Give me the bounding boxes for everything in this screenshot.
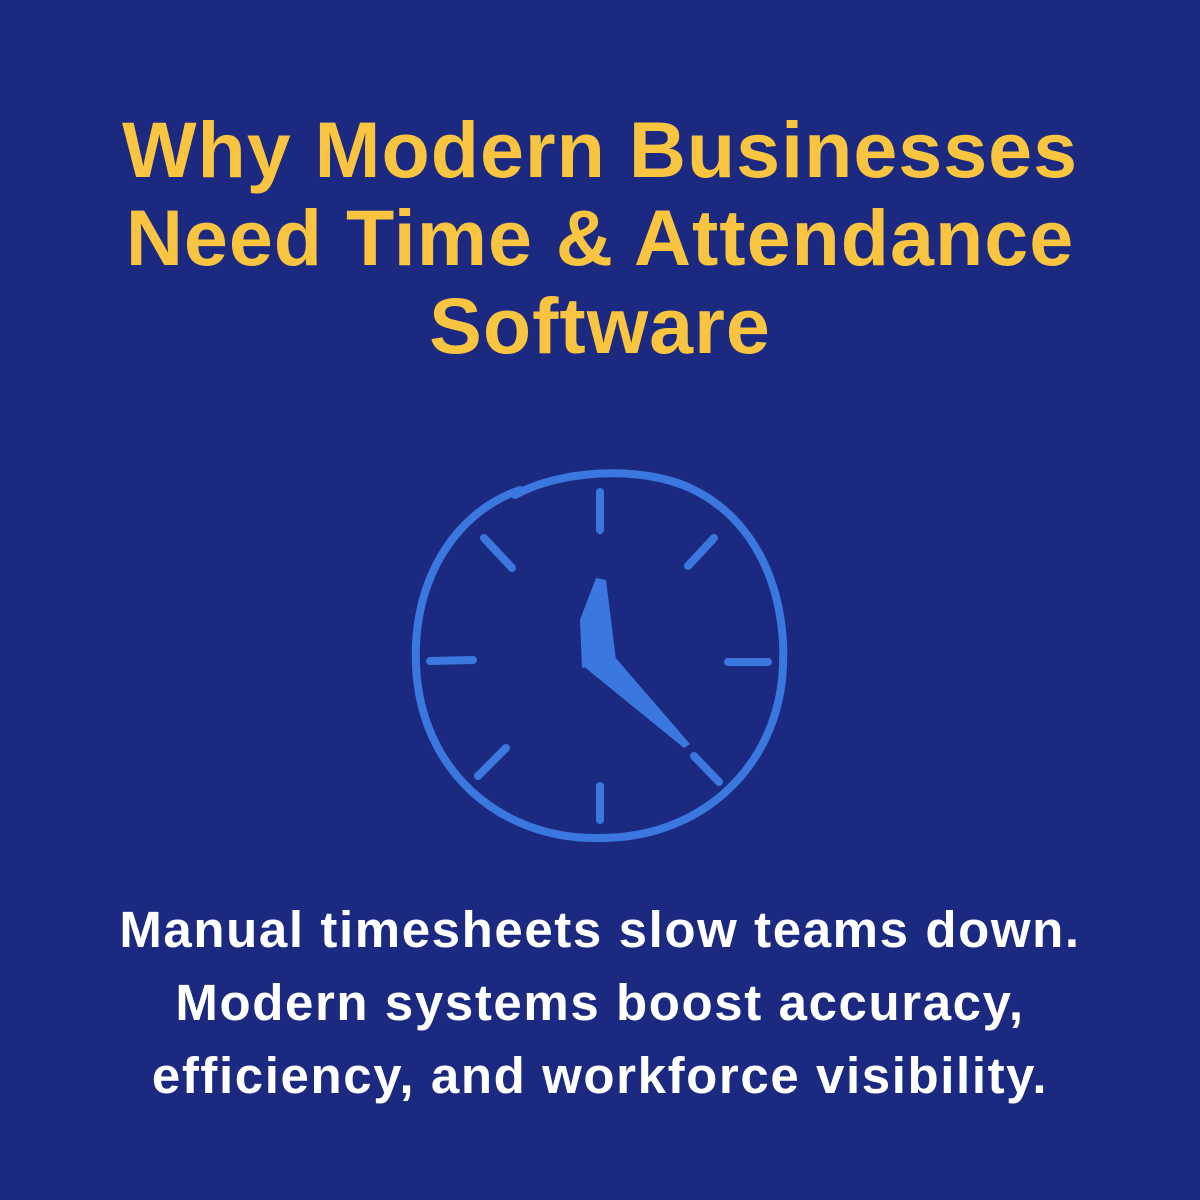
- clock face: [416, 473, 783, 838]
- title: Need Time & Attendance: [126, 193, 1074, 282]
- body text: efficiency, and workforce visibility.: [152, 1047, 1048, 1104]
- title: Software: [429, 281, 771, 370]
- clock hands: [580, 578, 690, 748]
- title: Why Modern Businesses: [122, 105, 1078, 194]
- hour ticks: [430, 492, 768, 820]
- body text: Manual timesheets slow teams down.: [119, 901, 1081, 958]
- body text: Modern systems boost accuracy,: [175, 974, 1025, 1031]
- title: [122, 105, 1078, 370]
- body text: [119, 901, 1081, 1104]
